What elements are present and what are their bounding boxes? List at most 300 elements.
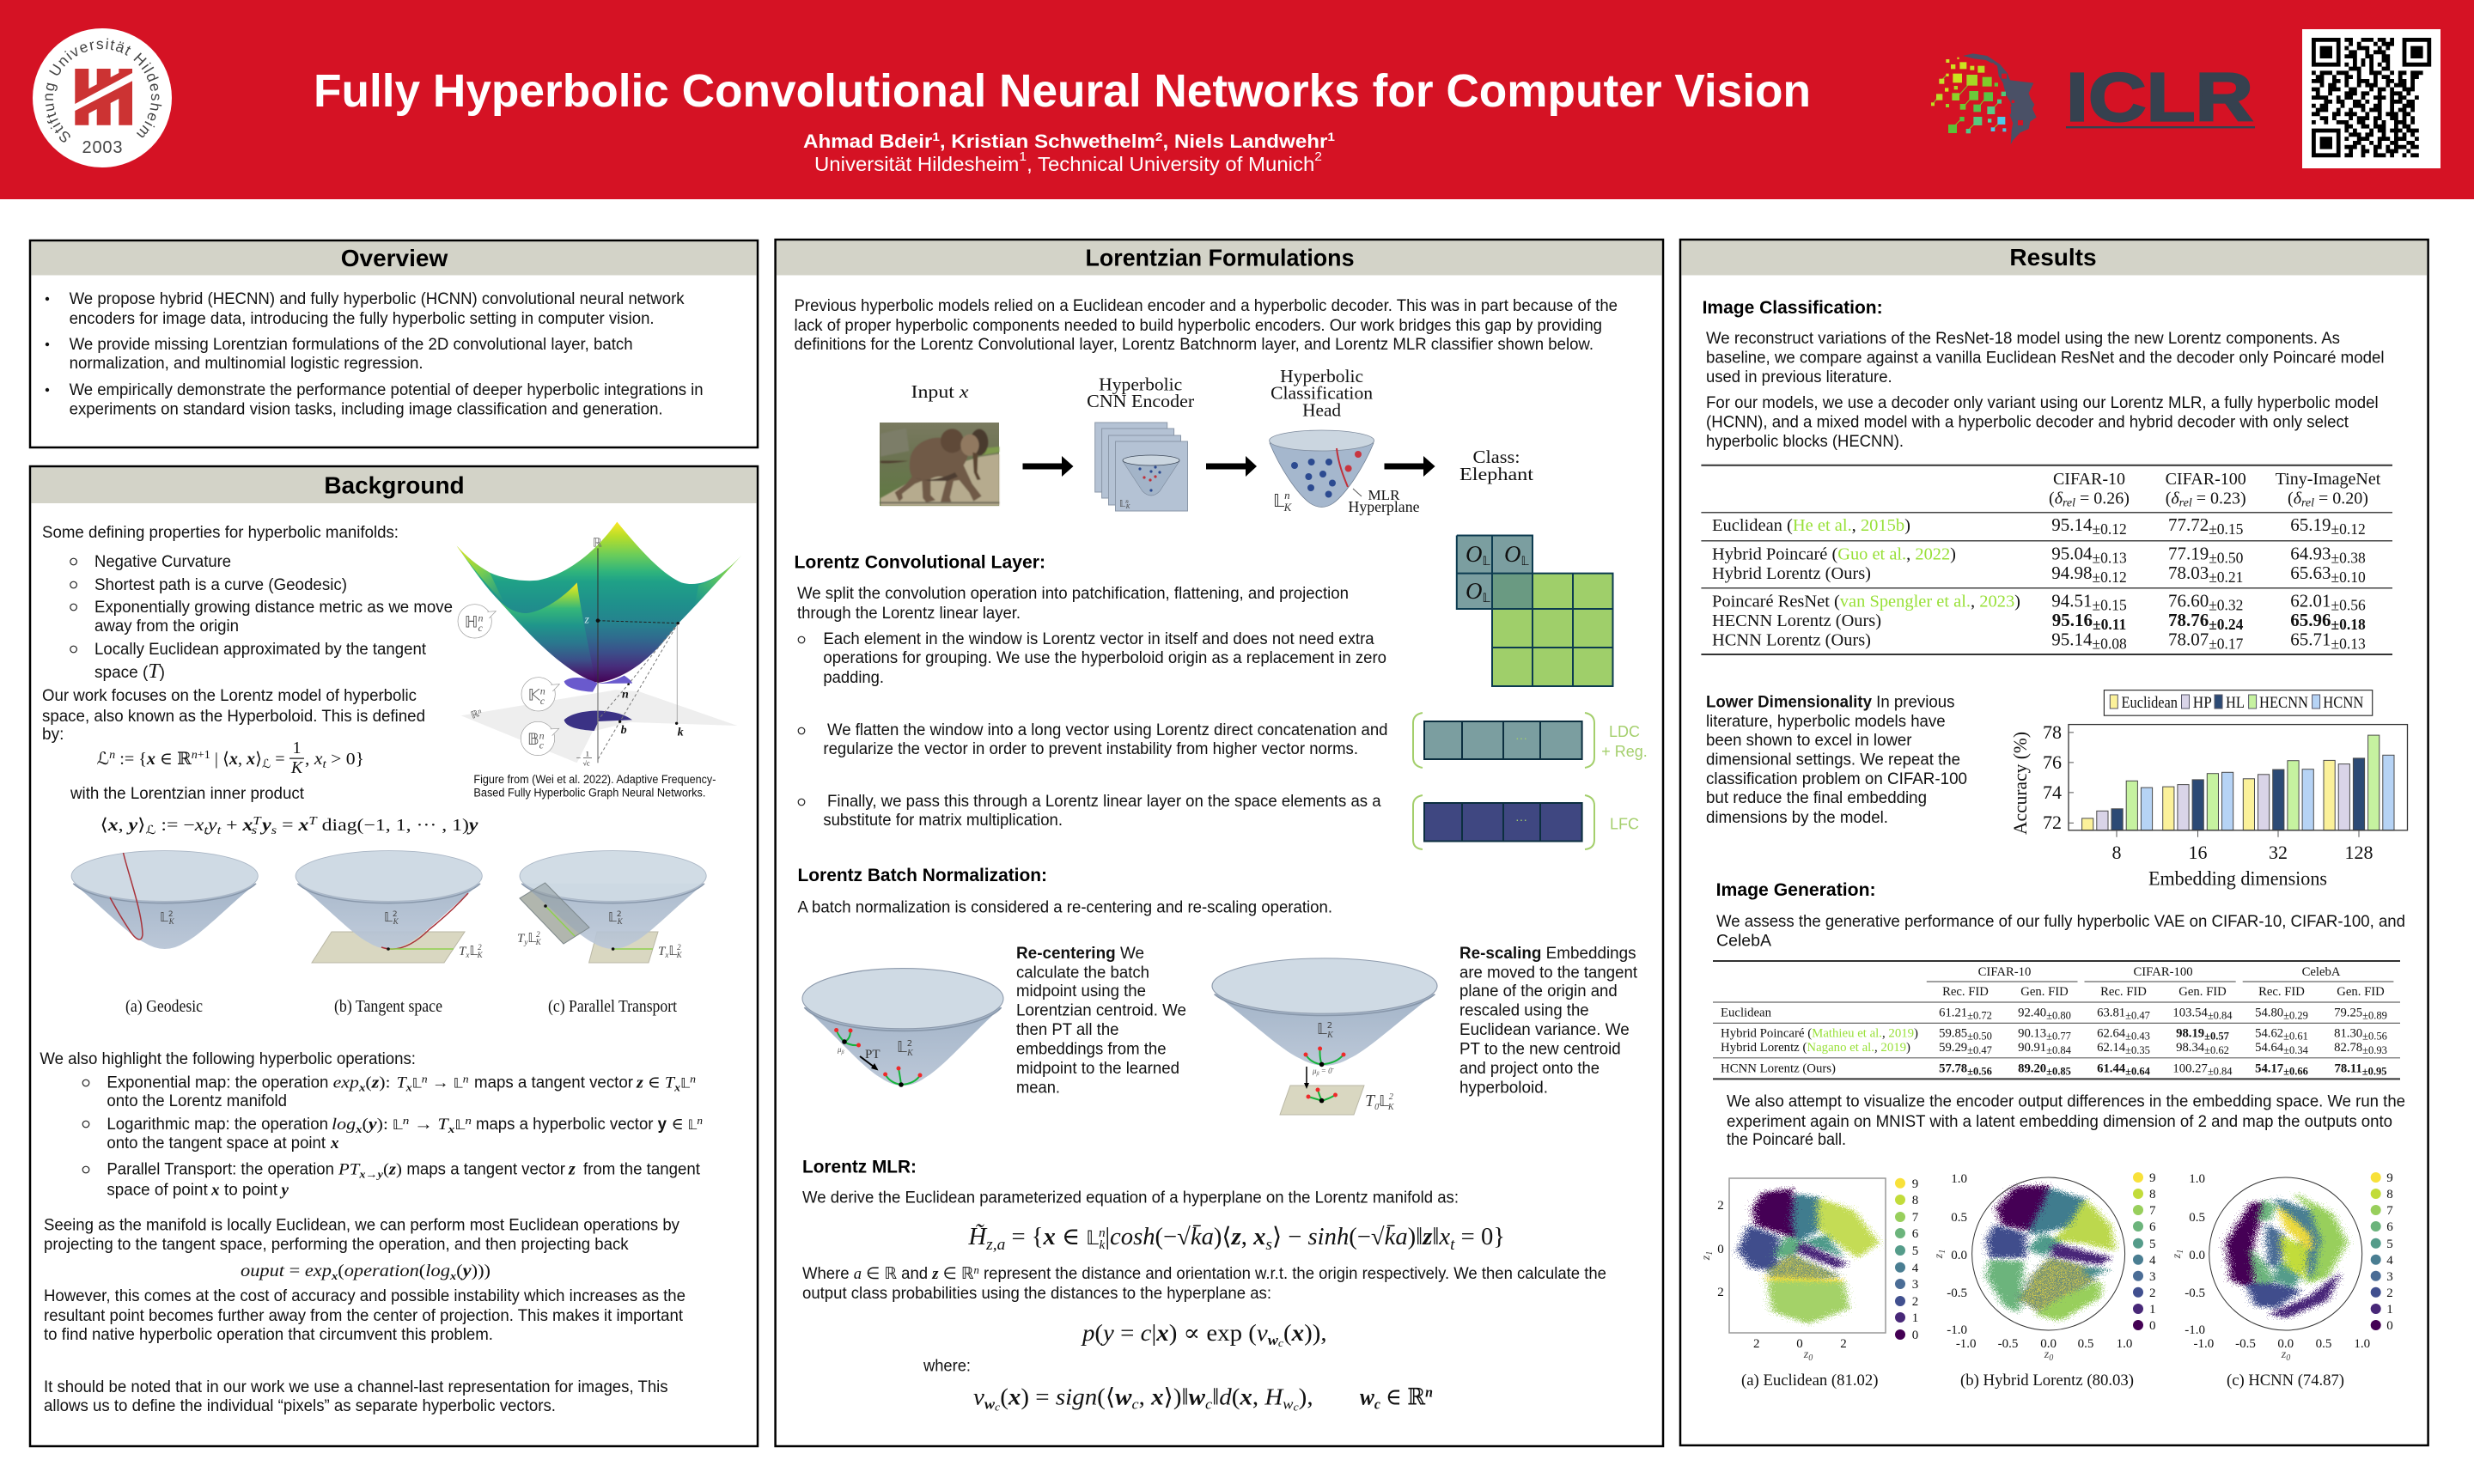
x axis label: Embedding dimensions [2148,868,2327,890]
caption: (b) Hybrid Lorentz (80.03) [1960,1371,2134,1390]
table: classification accuracy: ±0.17 [2209,636,2244,653]
text block: instability: to find native hyperbolic operation that circumvent this problem. [44,1326,493,1344]
label: predicted class: Class: [1472,447,1520,467]
text block: re-centering: embeddings from the [1016,1041,1167,1058]
formula: class probability: x)), [1292,1320,1325,1346]
table: classification accuracy: 78.03 [2168,563,2209,583]
axis labels [1700,1199,1847,1363]
table: generation FID: ±0.50 [1967,1031,1992,1043]
formula: signed distance: c [1131,1396,1139,1413]
axis labels: -1.0 [2194,1337,2214,1351]
label: encoder: CNN Encoder [1087,391,1194,411]
text: where: where: [923,1358,971,1376]
table: generation FID: 100.27 [2172,1062,2208,1076]
axis labels: 0.0 [2277,1337,2294,1351]
table: generation FID: ±0.43 [2125,1031,2150,1043]
text block: Lorentz model definition: by: [42,726,64,744]
label: input: Input x [911,381,969,402]
heading: Lorentzian Formulations: Lorentzian Formulations [1086,244,1354,271]
figure: tangent space: (b) Tangent space [334,997,442,1016]
affiliations: , Technical University of Munich [1027,153,1314,175]
text block: hyperbolic operations: z): [372,1074,389,1092]
formula: Lorentzian inner product: + [221,816,243,835]
table: generation FID: Rec. FID [1942,985,1989,999]
table: classification accuracy: 65.19 [2290,514,2331,535]
diagram: re-scaling: 0̄ [1374,1103,1381,1112]
diagram: re-centering: 𝕃 [897,1038,907,1056]
formula: Lorentzian inner product: x [297,816,308,835]
text block: classification description [1706,330,2385,451]
text block: hyperbolic operations: ( [383,1161,389,1179]
icon: hyperbolic classification head [1270,430,1420,515]
formula: Lorentzian inner product: y [206,816,217,835]
legend digits: 9 [2149,1171,2155,1185]
text: Lorentzian inner product intro: with the Lorentzian inner product [70,785,305,803]
text block: hyperbolic operations: y): [369,1116,387,1134]
diagram: re-scaling: 𝕃 [1317,1020,1327,1038]
callout: Klein model [521,678,559,711]
table: generation FID: Rec. FID [2100,985,2147,999]
label: encoder [1087,374,1194,411]
formula: Lorentz manifold: ℒ [262,758,271,771]
table: classification accuracy: = 0.20) [2314,490,2368,508]
text block: generation intro: CelebA [1716,932,1771,950]
table: generation FID: ±0.89 [2362,1010,2387,1022]
callout: Poincaré model: 𝔹 [527,731,539,749]
figure: parallel transport: K [676,951,683,959]
legend digits: 1 [2149,1303,2155,1317]
table: classification accuracy: (δ [2049,490,2063,508]
legend digits: 7 [2149,1204,2156,1218]
text block: hyperbolic operations: n [465,1114,472,1127]
formula: hyperplane: = 0} [1455,1224,1505,1250]
axis labels: -1.0 [1947,1323,1967,1337]
table: generation FID: 57.78 [1939,1062,1967,1076]
text block: convolution description: operations for grouping. We use the hyperboloid origin as a replacement in zero [823,649,1386,667]
table: generation FID: 78.11 [2335,1062,2362,1076]
text block: re-centering: then PT all the [1016,1021,1118,1039]
table: classification accuracy: 64.93 [2290,544,2331,564]
figure: parallel transport: 2 [677,943,681,952]
legend digits: 3 [2149,1270,2155,1284]
formula: signed distance: x) = sign(⟨w [1008,1384,1130,1410]
chart legend: HP [2193,694,2212,712]
text block: re-scaling: and project onto the [1459,1060,1600,1078]
text block: hyperbolic operations: y [280,1182,289,1200]
text block: tangent space operations: Seeing as the manifold is locally Euclidean, we can perform most Euclidean operations by [44,1217,679,1235]
logo: ICLR [1931,53,2255,144]
table: classification accuracy: ±0.11 [2093,616,2126,633]
text block: hyperbolic operations: ∈ 𝕃 [672,1116,697,1134]
text block: overview bullets: We propose hybrid (HECNN) and fully hyperbolic (HCNN) convolutional neural network [70,290,685,308]
plane [461,690,737,763]
text block: hyperbolic operations: x [355,1122,363,1135]
legend digits: 3 [2386,1270,2393,1284]
table: generation FID: ±0.95 [2362,1066,2386,1078]
chart axes and frame: 8 [2111,842,2122,863]
axis labels: 2 [1840,1337,1847,1351]
legend digits [2133,1171,2156,1333]
panel: Results [1680,240,2428,1445]
formula: Lorentz manifold: x, x⟩ [229,750,262,769]
table: classification accuracy: 65.96 [2290,610,2331,630]
table: classification accuracy: 78.07 [2168,629,2209,650]
figure: parallel transport: 𝕃 [527,930,536,946]
table: generation FID: ±0.56 [1967,1066,1992,1078]
arrow: encoder to head [1206,456,1257,477]
title: Fully Hyperbolic Convolutional Neural Networks for Computer Vision [314,65,1811,117]
text block: hyperbolic operations: onto the tangent space at point [107,1134,326,1153]
table: generation FID: 61.21 [1939,1007,1967,1020]
figure: parallel transport: 2 [536,930,540,939]
table: classification accuracy: 94.98 [2051,563,2093,583]
text block: convolution description: We split the convolution operation into patchification, flattening, and projection [797,585,1349,603]
formula: Lorentzian inner product: x [194,816,204,835]
text block: convolution description: We flatten the window into a long vector using Lorentz direct concatenation and [827,721,1388,739]
text block: hyperbolic manifold properties: Shortest path is a curve (Geodesic) [94,576,347,594]
text block: hyperbolic operations: Exponential map: the operation [107,1074,328,1092]
table: generation FID: Hybrid Lorentz (Nagano et al., 2019) [1721,1041,1910,1055]
formula: hyperplane: k [1100,1238,1106,1252]
figure caption: Based Fully Hyperbolic Graph Neural Networks. [473,787,705,800]
axis labels: 0 [1796,1337,1803,1351]
axes and projection lines [598,548,678,763]
text block: hyperbolic operations: We also highlight the following hyperbolic operations: [40,1050,416,1068]
axis labels: -0.5 [1947,1286,1967,1300]
text block: tangent space operations: projecting to the tangent space, performing the operation, and then projecting back [44,1236,629,1254]
axis labels: -0.5 [2235,1337,2256,1351]
table: classification accuracy: CIFAR-100 [2166,470,2246,489]
text block: hyperbolic operations: maps a tangent vector [474,1074,634,1092]
axis labels: 1.0 [2189,1172,2205,1186]
diagram: convolution window with padding: 𝕃 [1483,555,1491,569]
table: classification accuracy: 95.14 [2051,514,2093,535]
chart axes and frame: 72 [2043,812,2062,833]
axis labels: 1 [2176,1250,2185,1254]
formula: Lorentzian inner product: ℒ [145,824,155,837]
table: generation FID: Gen. FID [2020,985,2069,999]
formula: Lorentz manifold: ℒ [97,750,109,769]
affiliations: 1 [1019,149,1027,164]
table: generation FID: 59.29 [1939,1041,1967,1055]
diagram: flattened LDC vector: ··· [1515,731,1527,745]
legend digits: 8 [2386,1188,2393,1201]
table: classification accuracy: 78.76 [2168,610,2209,630]
axis labels: 2 [1717,1286,1724,1299]
text block: distance and probabilities [802,1263,1606,1303]
table: classification accuracy: (δ [2288,490,2301,508]
formula: Lorentzian inner product: := − [155,816,195,835]
image: elephant photo [880,423,999,506]
text block: distance and probabilities: Where a ∈ ℝ and z ∈ ℝ [802,1265,975,1283]
formula: Lorentzian inner product: s [271,824,277,837]
text block: hyperbolic operations: x [210,1182,220,1200]
table: generation FID: ±0.35 [2125,1044,2150,1056]
text block: embedding visualization: We also attempt to visualize the encoder output differences in the embedding space. We run the [1727,1093,2405,1111]
formula: signed distance: w [984,1396,996,1413]
table: generation FID: ±0.47 [2125,1010,2150,1022]
diagram: re-centering: β [841,1050,844,1055]
legend digits: 0 [1912,1329,1918,1342]
text block: overview bullets: normalization, and multinomial logistic regression. [70,355,424,373]
axis labels: z [1700,1256,1713,1260]
figure: tangent space: 𝕃 [469,943,478,958]
legend digits: 5 [2149,1238,2155,1251]
labels on hyperboloid: 1 [586,749,589,757]
axis labels: 0 [1717,1243,1724,1256]
labels on hyperboloid: n [477,707,483,715]
axis labels: 0.5 [2078,1337,2093,1351]
axis labels: 0 [1808,1353,1813,1363]
table: classification accuracy: ±0.15 [2093,597,2127,614]
table: classification accuracy: HCNN Lorentz (Ours) [1712,631,1871,650]
legend digits: 3 [1912,1278,1918,1292]
text block: lower dimensionality: dimensional settings. We repeat the [1706,751,1960,769]
heading: Image Generation: Image Generation: [1716,880,1876,900]
caption: (a) Euclidean (81.02) [1741,1371,1878,1390]
header banner [0,0,2474,199]
formula: signed distance: c [1205,1396,1213,1413]
axis labels: 0.0 [2189,1249,2205,1262]
table: classification accuracy: ±0.18 [2331,616,2366,633]
labels on hyperboloid: k [678,726,684,739]
table: classification accuracy: Hybrid Poincaré (Guo et al., 2022) [1712,545,1956,564]
diagram: flattened LDC vector: LDC [1609,723,1640,740]
axis labels: 0.5 [2189,1211,2205,1225]
heading: Lorentz Batch Normalization: Lorentz Batch Normalization: [797,866,1047,885]
text block: classification description: baseline, we compare against a vanilla Euclidean ResNet and the decoder only Poincaré model [1706,350,2385,368]
legend digits: 8 [2149,1188,2155,1201]
chart axes and frame [2043,721,2407,863]
text block: classification description: used in previous literature. [1706,368,1892,386]
figure: geodesic: (a) Geodesic [125,997,203,1016]
text block: generation intro: We assess the generative performance of our fully hyperbolic VAE on CIFAR-10, CIFAR-100, and [1716,913,2405,931]
authors: 1 [932,130,940,143]
legend digits: 8 [1912,1194,1918,1207]
text block: hyperbolic operations: onto the Lorentz manifold [107,1092,287,1110]
table: generation FID: 54.62 [2255,1027,2283,1041]
figure: tangent space: 𝕃 [384,909,393,925]
callout: Poincaré model: n [539,729,545,741]
table: generation FID: 98.19 [2176,1027,2204,1041]
table: classification accuracy: Tiny-ImageNet [2276,470,2381,489]
text block: hyperbolic operations: x [405,1081,412,1094]
text block: overview bullets: encoders for image data, introducing the fully hyperbolic setting in computer vision. [70,310,655,328]
text block: distance and probabilities: output class probabilities using the distances to the hyperplane as: [802,1285,1271,1303]
table: classification accuracy: 95.16 [2052,610,2093,630]
caption: (c) HCNN (74.87) [2227,1371,2344,1390]
figure: tangent space: K [477,951,484,959]
axis labels: -0.5 [2185,1286,2205,1300]
diagram: re-scaling: 2 [1327,1021,1332,1031]
table: generation FID: Rec. FID [2258,985,2305,999]
formula: hyperplane: s [1265,1236,1272,1254]
axis labels: 1.0 [2117,1337,2132,1351]
formula: hyperplane: sinh(−√k̄a)‖z‖x [1308,1224,1450,1250]
diagram: re-scaling: β [1316,1072,1319,1077]
heading: Image Classification: Image Classification: [1703,298,1883,318]
text block: hyperbolic operations: n [690,1073,696,1086]
diagram: re-centering: 2 [907,1039,912,1049]
table: classification accuracy: 62.01 [2290,591,2331,611]
text block: hyperbolic operations: n [463,1073,469,1086]
legend digits: 2 [1912,1295,1918,1309]
text block: convolution description: through the Lorentz linear layer. [797,605,1021,623]
table: generation FID: 61.44 [2097,1062,2125,1076]
text block: classification description: We reconstruct variations of the ResNet-18 model using the new Lorentz components. As [1706,330,2340,348]
text block: hyperbolic operations: n [403,1114,409,1127]
chart axes and frame: 78 [2043,721,2062,743]
arrow: head to class [1385,456,1435,477]
table: generation FID: 90.91 [2018,1041,2046,1055]
label: classification head: Classification [1271,383,1374,404]
text block: hyperbolic manifold properties: Locally Euclidean approximated by the tangent [94,641,427,659]
formula: signed distance: c [1293,1401,1299,1414]
formula: tangent space output: ouput = exp [241,1262,329,1280]
legend digits: 4 [1912,1262,1919,1275]
text block: formulations intro: lack of proper hyperbolic components needed to build hyperbolic encoders. Our work bridges this gap by providing [794,317,1602,335]
formula: signed distance: c [995,1401,1000,1414]
legend digits: 1 [2386,1303,2393,1317]
text block: hyperbolic manifold properties: Negative Curvature [94,553,231,571]
icon: ICLR head with pixels [1931,53,2037,144]
table: classification accuracy: ±0.50 [2209,550,2244,567]
chart legend: HECNN [2259,694,2308,712]
formula: signed distance: x⟩)‖w [1151,1384,1204,1410]
text block: hyperbolic operations: → [428,1074,454,1092]
figure: geodesic: 𝕃 [160,909,168,925]
legend digits [1895,1177,1919,1342]
text block: overview bullets: experiments on standard vision tasks, including image classification and generation. [70,400,663,419]
text block: hyperbolic operations: maps a tangent vector [406,1161,566,1179]
authors: , Niels Landwehr [1162,131,1328,152]
axis labels [1933,1172,2132,1363]
diagram: re-scaling [1212,958,1437,1115]
authors: 2 [1155,130,1163,143]
table: generation FID: HCNN Lorentz (Ours) [1721,1062,1836,1076]
text block: re-centering [1016,945,1186,1098]
table: classification accuracy: ±0.13 [2093,550,2127,567]
labels on hyperboloid: n [622,688,629,701]
legend digits: 6 [2386,1220,2393,1234]
icon: encoder feature stack: 𝕃 [1119,498,1125,509]
formula: Lorentz manifold: t [322,758,327,771]
text block: hyperbolic operations: exp [333,1074,356,1092]
axis labels: 1 [1938,1250,1947,1254]
table: classification accuracy: Hybrid Lorentz (Ours) [1712,564,1871,583]
chart legend: HCNN [2323,694,2364,712]
callout: Poincaré model [521,721,559,756]
figure caption [473,773,716,800]
text block: channel-last note [44,1378,668,1415]
text block: re-centering: Re-centering We [1016,945,1144,963]
icon: encoder feature stack [1095,423,1187,511]
table: generation FID: ±0.47 [1967,1044,1992,1056]
labels on hyperboloid: √c [583,760,590,768]
table: generation FID: ±0.84 [2208,1010,2233,1022]
formula: tangent space output: ( [456,1262,463,1280]
text block: re-scaling: Re-scaling Embeddings [1459,945,1636,963]
diagram: convolution window with padding: O [1466,541,1483,567]
legend digits: 4 [2386,1254,2393,1268]
formula: Lorentzian inner product: y [260,816,271,835]
table: generation FID: ±0.64 [2125,1066,2151,1078]
formula: hyperplane: n [1099,1226,1106,1240]
text block: hyperbolic operations: 𝕃 [393,1116,403,1133]
axis labels [2171,1172,2370,1363]
table: classification accuracy: ±0.56 [2331,597,2366,614]
table: classification accuracy: rel [2063,497,2075,510]
formula: Lorentz manifold: n [109,749,115,762]
table: generation FID: ±0.29 [2283,1010,2308,1022]
table: generation FID: 79.25 [2334,1007,2362,1020]
text block: hyperbolic operations: to point [224,1182,278,1200]
label: classification head: Head [1302,399,1342,420]
table: classification accuracy: ±0.12 [2331,520,2366,538]
figure: parallel transport: 𝕃 [668,943,677,958]
formula: signed distance: ), [1299,1384,1313,1410]
legend digits: 2 [2386,1286,2393,1300]
legend digits: 5 [2386,1238,2393,1251]
table: classification accuracy: ±0.10 [2331,569,2366,586]
table: classification accuracy: ±0.38 [2331,550,2366,567]
axis labels: 1.0 [1951,1172,1967,1186]
text block: instability: resultant point becomes further away from the center of projection. This makes it important [44,1307,684,1325]
text block: hyperbolic operations: x [673,1081,681,1094]
legend digits: 5 [1912,1244,1918,1258]
text block: hyperbolic operations: 𝕃 [680,1075,691,1092]
formula: Lorentz manifold: := { [115,750,147,769]
text block: channel-last note: allows us to define the individual “pixels” as separate hyperbolic vectors. [44,1397,556,1415]
diagram: re-centering [802,969,1003,1087]
formula: hyperplane: | [1105,1224,1110,1250]
table: generation FID: ±0.80 [2046,1010,2071,1022]
text block: hyperbolic operations: PT [338,1161,357,1179]
table: generation FID: 54.80 [2255,1007,2283,1020]
text block: classification description: For our models, we use a decoder only variant using our Lorentz MLR, a fully hyperbolic model [1706,394,2379,412]
callout: Poincaré model: c [539,739,545,751]
text: batch normalization intro: A batch normalization is considered a re-centering and re-scaling operation. [797,899,1332,917]
text block: formulations intro [794,297,1618,354]
text block: hyperbolic manifold properties [42,524,453,683]
diagram: re-centering: K [906,1049,914,1058]
heading: Results: Results [2009,244,2097,271]
table: generation FID: 54.17 [2255,1062,2283,1076]
figure: tangent space: 2 [393,910,398,919]
chart: accuracy by embedding dimension [2009,690,2407,890]
text block: re-scaling: rescaled using the [1459,1001,1589,1020]
callout: hyperboloid model: c [478,622,484,634]
table: generation FID: Hybrid Poincaré (Mathieu et al., 2019) [1721,1027,1918,1041]
formula: weight domain: n [1425,1384,1433,1401]
legend digits: 4 [2149,1254,2156,1268]
table: generation FID: 82.78 [2334,1041,2362,1055]
text block: re-scaling: hyperboloid. [1459,1079,1548,1098]
table: generation FID: ±0.84 [2208,1066,2233,1078]
text block: overview bullets: We empirically demonstrate the performance potential of deeper hyperbolic integrations in [70,381,704,399]
text block: classification description: (HCNN), and a mixed model with a hyperbolic decoder and hybrid decoder with only select [1706,414,2349,432]
table: classification accuracy: CIFAR-10 [2053,470,2125,489]
text block: embedding visualization: the Poincaré ball. [1727,1131,1846,1149]
affiliations: Universität Hildesheim [814,153,1011,175]
callout: Klein model: n [540,685,545,697]
legend digits: 7 [2386,1204,2393,1218]
diagram: LFC vector: LFC [1610,816,1639,833]
legend digits: 9 [1912,1177,1918,1191]
text block: re-scaling: PT to the new centroid [1459,1041,1621,1058]
diagram: re-centering: μ [838,1045,842,1054]
panel: Lorentzian Formulations [776,240,1663,1446]
